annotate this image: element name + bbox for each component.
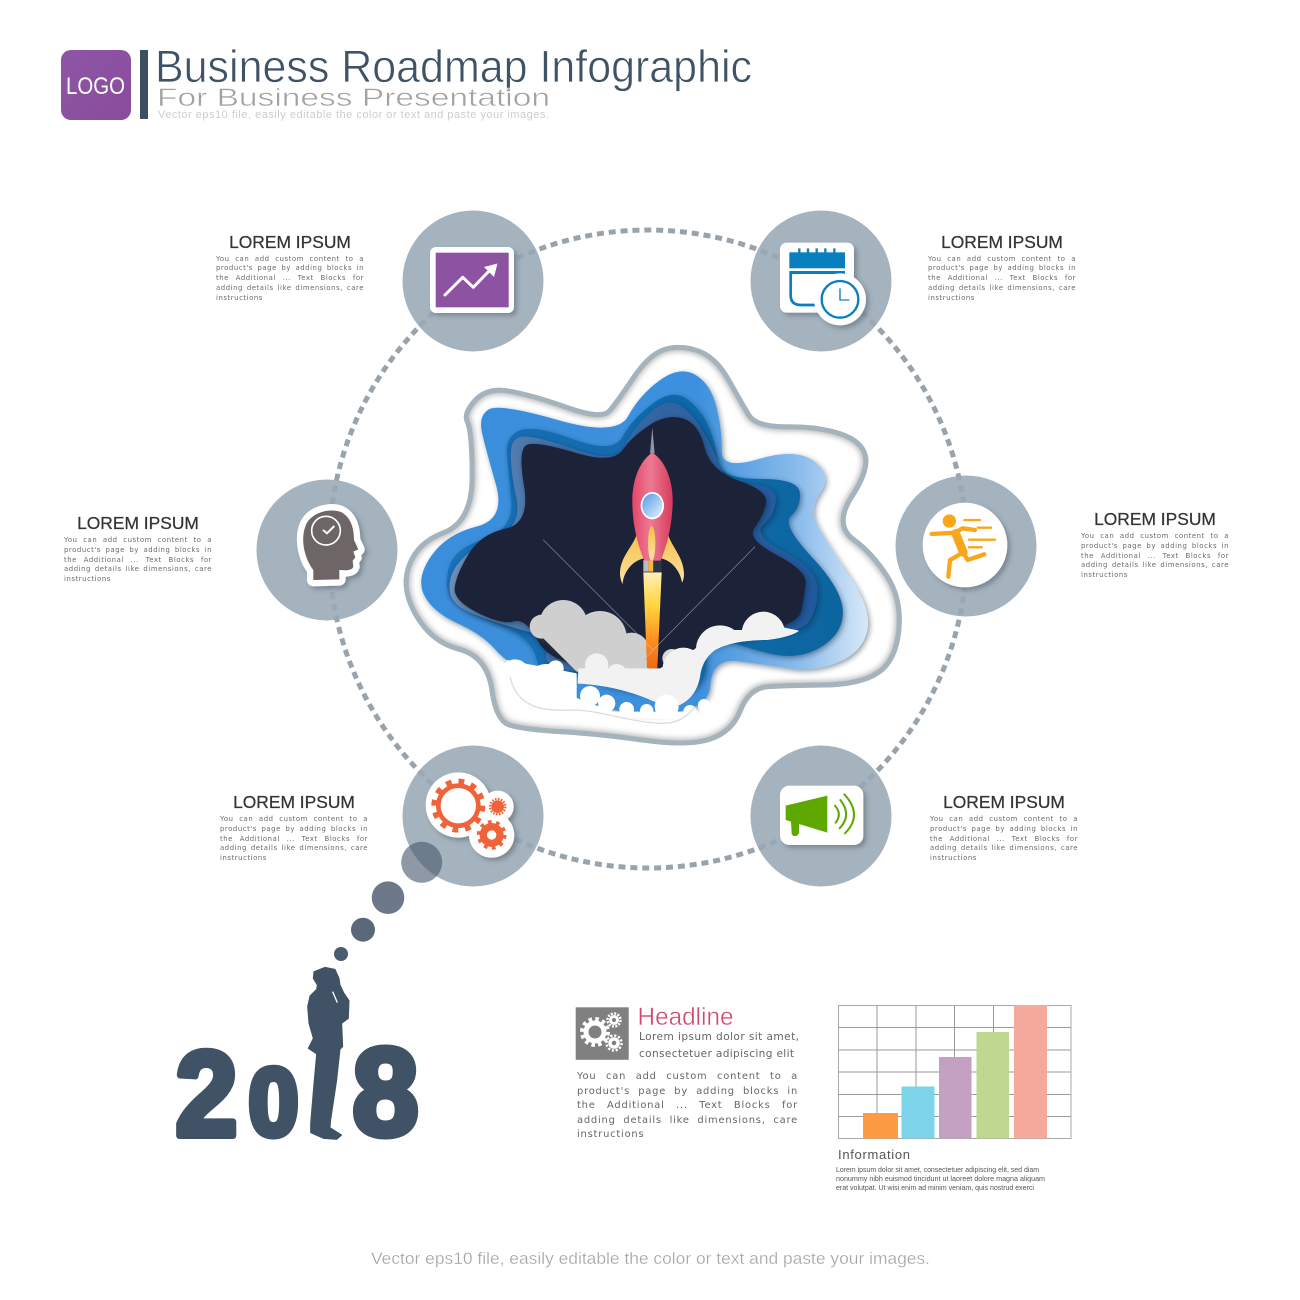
- text block: bottom left: the Additional ... Text Blocks for: [220, 835, 368, 843]
- text block: bottom right: You can add custom content to a: [930, 815, 1078, 823]
- mid blue paper layer: [447, 395, 843, 694]
- icon: growth chart: [430, 247, 514, 313]
- rocket: [620, 427, 684, 668]
- text block: bottom left: [220, 792, 368, 862]
- grey paper rim: [404, 345, 902, 745]
- text block: left: LOREM IPSUM: [77, 513, 199, 533]
- text block: right: You can add custom content to a: [1081, 532, 1229, 540]
- text block: left: You can add custom content to a: [64, 536, 212, 544]
- pale smoke cloud: [577, 612, 799, 707]
- headline body text: the Additional ... Text Blocks for: [577, 1100, 798, 1111]
- footer note: Vector eps10 file, easily editable the color or text and paste your images.: [371, 1249, 930, 1268]
- headline intro text: [639, 1031, 799, 1060]
- year 2018: 2: [176, 1026, 238, 1162]
- text block: top left: adding details like dimensions, care: [216, 284, 364, 292]
- thinking man silhouette: [308, 967, 349, 1139]
- text block: left: instructions: [64, 575, 111, 583]
- text block: right: instructions: [1081, 571, 1128, 579]
- paper ridge line: [510, 677, 695, 723]
- year 2018: 8: [352, 1024, 418, 1162]
- chart caption text: erat volutpat. Ut wisi enim ad minim veniam, quis nostrud exerci: [836, 1183, 1034, 1192]
- icon: head with clock: [303, 510, 358, 580]
- text block: right: product's page by adding blocks in: [1081, 542, 1229, 550]
- headline body text: instructions: [577, 1129, 644, 1140]
- white foreground clouds: [501, 659, 710, 720]
- text block: top left: the Additional ... Text Blocks for: [216, 274, 364, 282]
- header note: Vector eps10 file, easily editable the color or text and paste your images.: [158, 109, 549, 121]
- text block: top left: LOREM IPSUM: [229, 232, 351, 252]
- text block: right: [1081, 509, 1229, 579]
- thin light lines: [543, 540, 755, 657]
- headline body text: [577, 1071, 798, 1140]
- subtitle: For Business Presentation: [157, 84, 550, 112]
- chart caption heading: Information: [838, 1147, 910, 1162]
- header divider bar: [140, 50, 148, 119]
- text block: top left: You can add custom content to a: [216, 254, 364, 262]
- chart caption text: Lorem ipsum dolor sit amet, consectetuer adipiscing elit, sed diam: [836, 1165, 1039, 1174]
- text block: left: the Additional ... Text Blocks for: [64, 556, 212, 564]
- thought bubbles: [334, 842, 442, 961]
- text block: bottom left: instructions: [220, 854, 267, 862]
- text block: top right: [928, 232, 1076, 302]
- text block: bottom right: [930, 792, 1078, 862]
- text block: top left: product's page by adding blocks in: [216, 264, 364, 272]
- headline: Headline: [638, 1003, 734, 1031]
- headline body text: adding details like dimensions, care: [577, 1114, 798, 1126]
- deep blue paper layer: [449, 402, 817, 676]
- text block: left: [64, 513, 212, 583]
- chart caption text: [836, 1165, 1045, 1192]
- year 2018: [176, 1024, 418, 1162]
- logo badge: [61, 50, 131, 120]
- text block: bottom right: product's page by adding blocks in: [930, 825, 1078, 833]
- night sky: [455, 417, 806, 674]
- text block: top right: product's page by adding blocks in: [928, 264, 1076, 272]
- icon: megaphone: [780, 786, 863, 845]
- text block: right: LOREM IPSUM: [1094, 509, 1216, 529]
- text block: top right: adding details like dimensions, care: [928, 284, 1076, 292]
- text block: bottom right: adding details like dimensions, care: [930, 844, 1078, 852]
- headline body text: product's page by adding blocks in: [577, 1086, 798, 1096]
- text block: bottom left: product's page by adding blocks in: [220, 825, 368, 833]
- text block: top left: instructions: [216, 294, 263, 302]
- outer white paper layer: [404, 345, 902, 745]
- icon: gears: [426, 772, 514, 858]
- text block: bottom left: You can add custom content to a: [220, 815, 368, 823]
- icon: running person: [923, 503, 1007, 587]
- text block: bottom left: LOREM IPSUM: [233, 792, 355, 812]
- text block: right: adding details like dimensions, care: [1081, 561, 1229, 569]
- text block: top right: You can add custom content to a: [928, 254, 1076, 262]
- text block: top right: instructions: [928, 294, 975, 302]
- text block: top right: the Additional ... Text Blocks for: [928, 274, 1076, 282]
- text block: bottom right: the Additional ... Text Blocks for: [930, 835, 1078, 843]
- text block: top left: [216, 232, 364, 302]
- chart caption text: nonummy nibh euismod tincidunt ut laoreet dolore magna aliquam: [836, 1174, 1045, 1183]
- text block: bottom right: instructions: [930, 854, 977, 862]
- title: Business Roadmap Infographic: [155, 41, 752, 92]
- text block: top right: LOREM IPSUM: [941, 232, 1063, 252]
- inner shading of white layer: [404, 345, 902, 745]
- bar chart: [838, 1005, 1071, 1138]
- text block: left: adding details like dimensions, care: [64, 565, 212, 573]
- text block: right: the Additional ... Text Blocks for: [1081, 552, 1229, 560]
- headline intro text: consectetuer adipiscing elit: [639, 1048, 794, 1060]
- year 2018: 0: [248, 1049, 298, 1156]
- roadmap circles and dashed ring: [256, 210, 1036, 886]
- logo badge: LOGO: [66, 73, 125, 100]
- text block: bottom right: LOREM IPSUM: [943, 792, 1065, 812]
- icon: calendar and clock: [780, 243, 866, 325]
- text block: bottom left: adding details like dimensions, care: [220, 844, 368, 852]
- headline icon: gears: [576, 1007, 629, 1060]
- headline body text: You can add custom content to a: [577, 1071, 798, 1082]
- light blue paper layer: [421, 371, 868, 714]
- central paper-cut rocket scene: [404, 345, 902, 745]
- headline intro text: Lorem ipsum dolor sit amet,: [639, 1031, 799, 1043]
- grey smoke cloud: [530, 600, 650, 672]
- text block: left: product's page by adding blocks in: [64, 546, 212, 554]
